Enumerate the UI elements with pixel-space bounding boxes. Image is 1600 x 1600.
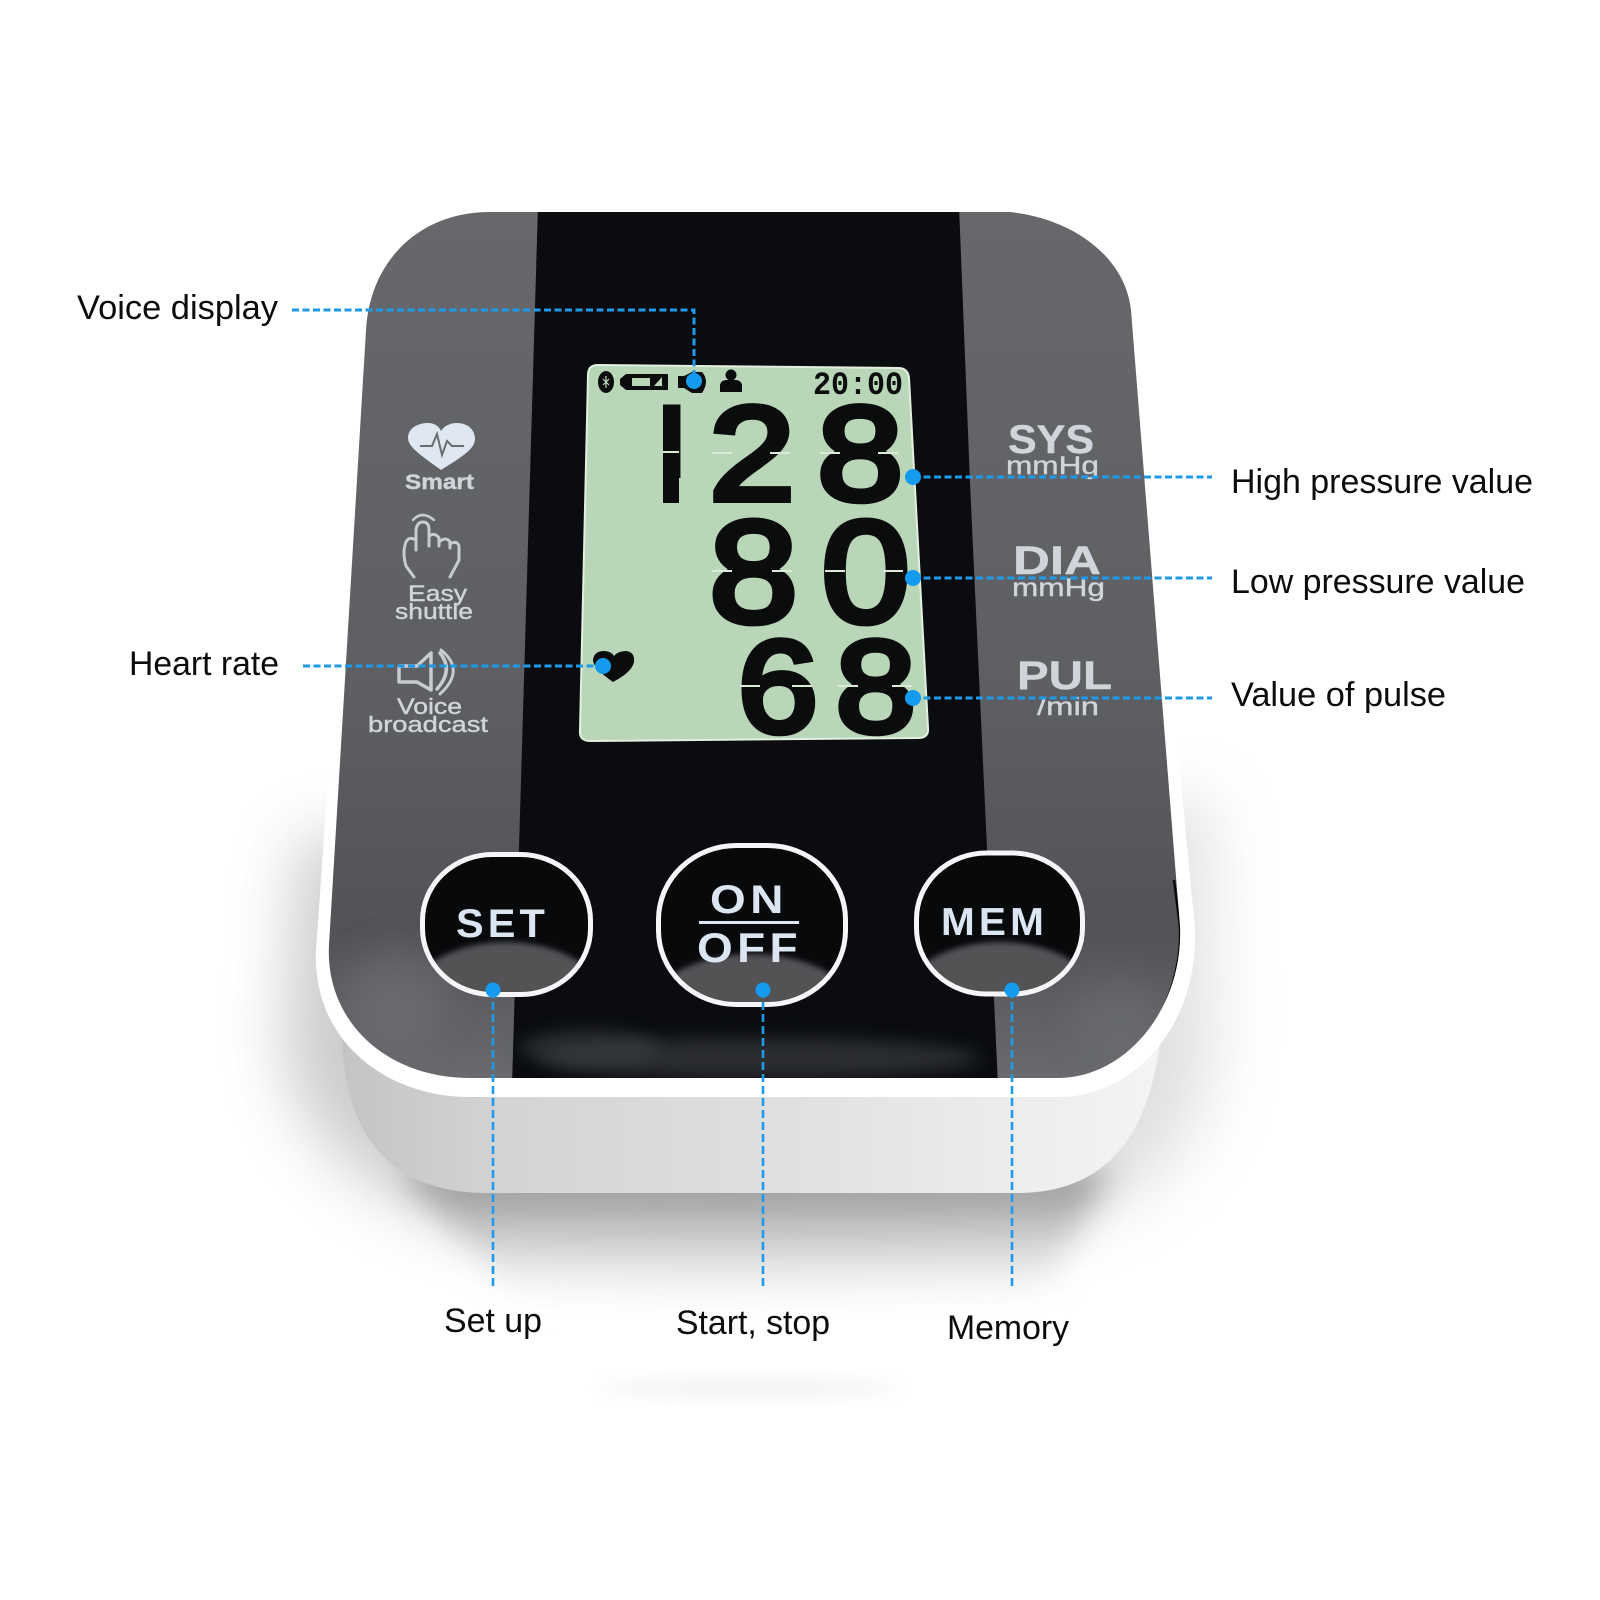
infographic: blood pressure monitor diagram	[77, 212, 1532, 1392]
pulse reading: 68	[738, 614, 916, 759]
right label: DIA mmHg: DIA	[1013, 539, 1101, 583]
lcd clock: 20:00	[813, 367, 903, 404]
shadow beneath device	[285, 800, 1215, 1398]
LCD screen	[580, 365, 928, 759]
device lower body	[342, 1040, 1160, 1193]
device white rim	[316, 212, 1195, 1097]
icon: speaker with sound waves	[399, 650, 453, 694]
left feature: Voice broadcast	[368, 650, 488, 737]
callout: Value of pulse: Value of pulse	[1231, 676, 1446, 714]
callout: Voice display	[77, 289, 702, 389]
right label: PUL /min	[1017, 654, 1112, 721]
callout: Voice display: Voice display	[77, 289, 278, 327]
icon: heart with pulse	[408, 423, 475, 470]
button: SET: SET	[456, 902, 549, 946]
button: ON/OFF	[656, 843, 848, 1007]
right label: SYS mmHg: SYS	[1008, 418, 1094, 462]
button: ON/OFF: ON	[710, 878, 788, 922]
callout: Set up: Set up	[444, 1302, 542, 1340]
button: ON/OFF: OFF	[697, 924, 802, 971]
callout: Heart rate: Heart rate	[129, 645, 279, 683]
right label: DIA mmHg	[1012, 539, 1105, 602]
left feature: Easy shuttle	[395, 515, 473, 624]
callout: Set up	[444, 982, 542, 1340]
right label: DIA mmHg: mmHg	[1012, 574, 1105, 602]
callout: Low pressure value	[905, 563, 1525, 601]
right label: PUL /min: /min	[1037, 693, 1099, 721]
callout: Memory: Memory	[947, 1309, 1069, 1347]
lcd icon: speaker	[678, 372, 706, 393]
right label: SYS mmHg	[1006, 418, 1099, 480]
callout: Heart rate	[129, 645, 611, 683]
callout: Low pressure value: Low pressure value	[1231, 563, 1525, 601]
left feature: Smart: Smart	[405, 471, 474, 494]
lcd icon: heart	[593, 651, 634, 682]
lcd icon: battery	[620, 374, 668, 390]
callout: Start, stop: Start, stop	[676, 1304, 830, 1342]
callout: High pressure value	[905, 463, 1533, 501]
callout: Start, stop	[676, 982, 830, 1342]
diastolic reading: 80	[710, 492, 910, 653]
systolic reading: 128	[624, 380, 903, 528]
icon: pointing hand	[404, 515, 459, 577]
right label: SYS mmHg: mmHg	[1006, 452, 1099, 480]
lcd icon: user	[720, 370, 742, 392]
left feature: Voice broadcast: Voice	[397, 694, 462, 719]
lcd icon: bluetooth	[598, 371, 614, 393]
button: SET	[420, 852, 593, 997]
right label: PUL /min: PUL	[1017, 654, 1112, 698]
button: MEM	[914, 850, 1085, 996]
left feature: Voice broadcast: broadcast	[368, 712, 488, 737]
callout: Value of pulse	[905, 676, 1446, 714]
callout: High pressure value: High pressure value	[1231, 463, 1533, 501]
button: MEM: MEM	[941, 901, 1048, 944]
callout: Memory	[947, 982, 1069, 1347]
left feature: Easy shuttle: shuttle	[395, 599, 473, 624]
device front panel	[300, 200, 1220, 1090]
left feature: Easy shuttle: Easy	[408, 581, 467, 606]
left feature: Smart	[405, 423, 475, 494]
